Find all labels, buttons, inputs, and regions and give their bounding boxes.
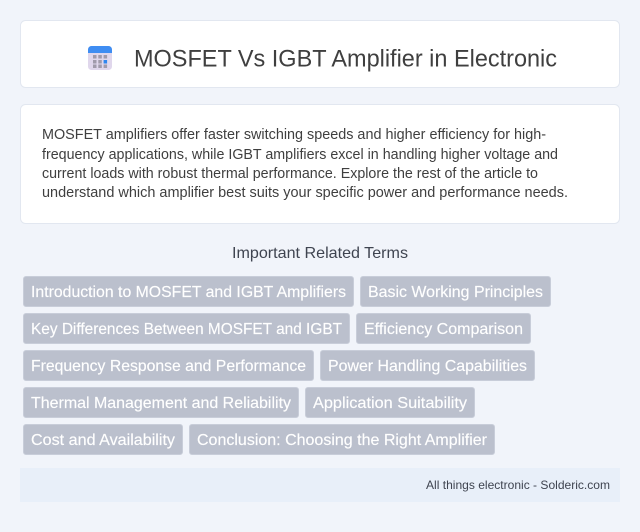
panel: title card [20, 20, 620, 88]
text block: introduction paragraph: MOSFET amplifiers offer faster switching speeds and higher efficiency for high- [42, 127, 546, 143]
text block: introduction paragraph [42, 127, 568, 201]
text block: introduction paragraph: current loads with robust thermal performance. Explore the rest of the article to [42, 166, 538, 182]
tag: efficiency [356, 314, 530, 344]
tag: key differences [24, 314, 350, 344]
title: MOSFET Vs IGBT Amplifier in Electronic [134, 46, 557, 72]
tag: cost: Cost and Availability [31, 432, 175, 449]
tag: cost [24, 424, 182, 454]
tag: frequency response [24, 350, 314, 380]
tag: application suitability: Application Suitability [313, 395, 467, 412]
footer: All things electronic - Solderic.com [426, 478, 610, 492]
tag: power handling: Power Handling Capabilities [328, 358, 527, 375]
tag: frequency response: Frequency Response and Performance [31, 358, 306, 375]
tag: conclusion: Conclusion: Choosing the Right Amplifier [197, 432, 488, 449]
heading: related terms: Important Related Terms [232, 245, 408, 262]
tag: introduction: Introduction to MOSFET and IGBT Amplifiers [31, 284, 346, 301]
tag: thermal management: Thermal Management and Reliability [31, 395, 291, 412]
panel: introduction [20, 104, 620, 224]
panel: related term tags [24, 276, 550, 454]
tag: key differences: Key Differences Between MOSFET and IGBT [31, 321, 342, 338]
tag: introduction [24, 276, 354, 306]
tag: application suitability [306, 388, 474, 418]
text block: introduction paragraph: understand which amplifier best suits your specific power and performance needs. [42, 185, 568, 201]
text block: introduction paragraph: frequency applications, while IGBT amplifiers excel in handling higher voltage and [42, 147, 558, 163]
icon: calendar grid [88, 46, 112, 70]
tag: working principles: Basic Working Principles [368, 284, 543, 301]
tag: conclusion [190, 424, 494, 454]
footer [20, 468, 620, 502]
tag: efficiency: Efficiency Comparison [364, 321, 523, 338]
tag: thermal management [24, 388, 298, 418]
tag: power handling [320, 350, 534, 380]
tag: working principles [360, 276, 550, 306]
